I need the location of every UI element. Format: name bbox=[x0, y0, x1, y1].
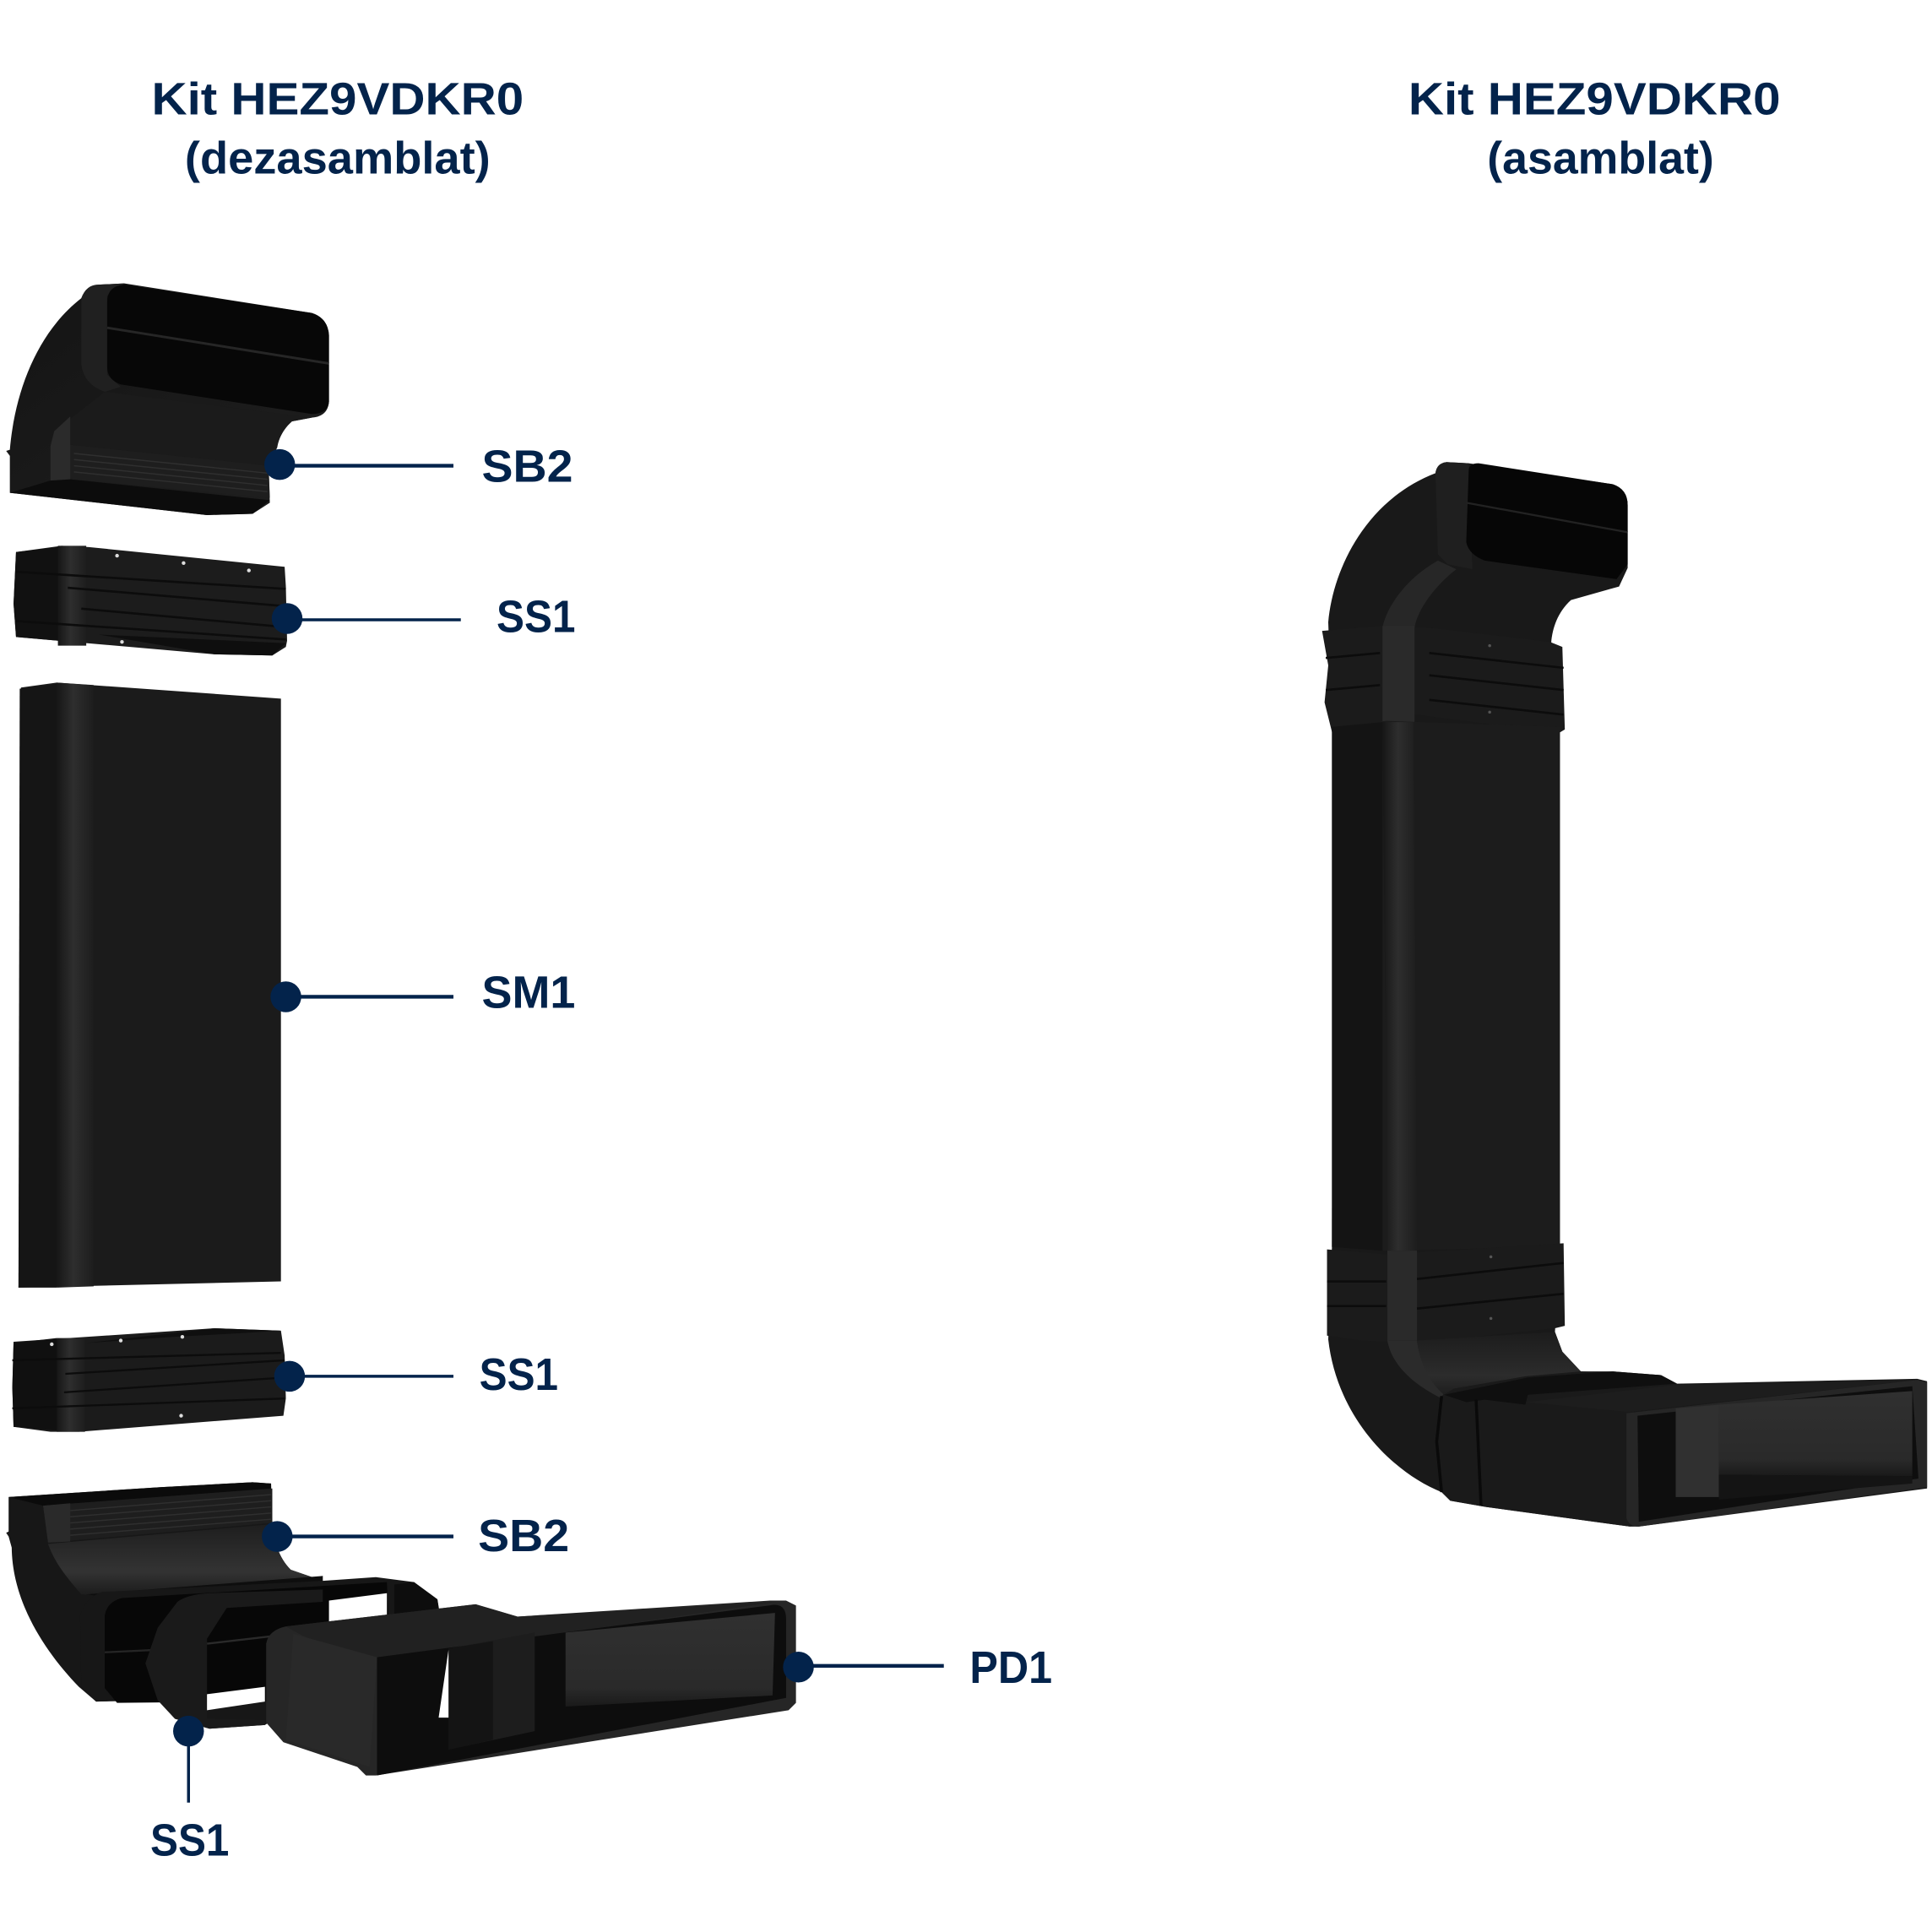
callout: SS1 lower: SS1 bbox=[480, 1349, 558, 1400]
top elbow frame bbox=[1435, 462, 1473, 569]
callout: SS1 upper bbox=[272, 592, 575, 643]
opening: white slot through diffuser bbox=[438, 1650, 448, 1718]
callout: SB2 bottom: SB2 bbox=[478, 1511, 569, 1561]
part: lower connector SS1 bbox=[13, 1328, 286, 1432]
top elbow opening bbox=[1466, 464, 1628, 579]
opening: white gap through connector bottom bbox=[207, 1687, 265, 1710]
title: assembled kit: Kit HEZ9VDKR0 bbox=[1408, 74, 1781, 125]
callout: SB2 bottom bbox=[262, 1511, 569, 1561]
title: assembled kit bbox=[1408, 74, 1781, 184]
callout: PD1: PD1 bbox=[969, 1642, 1052, 1693]
opening: white gap through connector top bbox=[329, 1593, 387, 1621]
callout: PD1 bbox=[783, 1642, 1052, 1693]
part: bottom elbow SB2 bbox=[6, 1482, 323, 1701]
part: connector SS1 in bottom assembly bbox=[80, 1577, 440, 1728]
callout: SS1 bottom bbox=[150, 1716, 229, 1866]
diffuser outlet bbox=[1626, 1380, 1927, 1527]
part: straight duct SM1 bbox=[19, 682, 281, 1288]
top elbow inner corner bbox=[1382, 561, 1457, 628]
title: disassembled kit: Kit HEZ9VDKR0 bbox=[151, 74, 524, 125]
part: upper connector SS1 bbox=[14, 545, 287, 655]
upper connector band bbox=[1322, 626, 1565, 733]
assembled duct bbox=[1322, 462, 1927, 1527]
callout: SS1 upper: SS1 bbox=[497, 592, 575, 643]
part: plenum diffuser PD1 bbox=[266, 1600, 796, 1776]
bottom connector bbox=[1435, 1371, 1677, 1527]
callout: SS1 lower bbox=[274, 1349, 558, 1400]
lower elbow inner corner bbox=[1387, 1341, 1444, 1398]
callout: SM1: SM1 bbox=[482, 968, 575, 1018]
part: top elbow SB2 bbox=[6, 284, 329, 515]
lower connector band bbox=[1327, 1243, 1565, 1343]
callout: SB2 top bbox=[264, 442, 573, 492]
title: assembled kit: (asamblat) bbox=[1487, 133, 1714, 184]
callout: SB2 top: SB2 bbox=[482, 442, 573, 492]
callout: SM1 bbox=[270, 968, 575, 1018]
main vertical body bbox=[1332, 721, 1560, 1251]
title: disassembled kit bbox=[151, 74, 524, 184]
title: disassembled kit: (dezasamblat) bbox=[185, 133, 491, 184]
callout: SS1 bottom: SS1 bbox=[150, 1815, 229, 1866]
